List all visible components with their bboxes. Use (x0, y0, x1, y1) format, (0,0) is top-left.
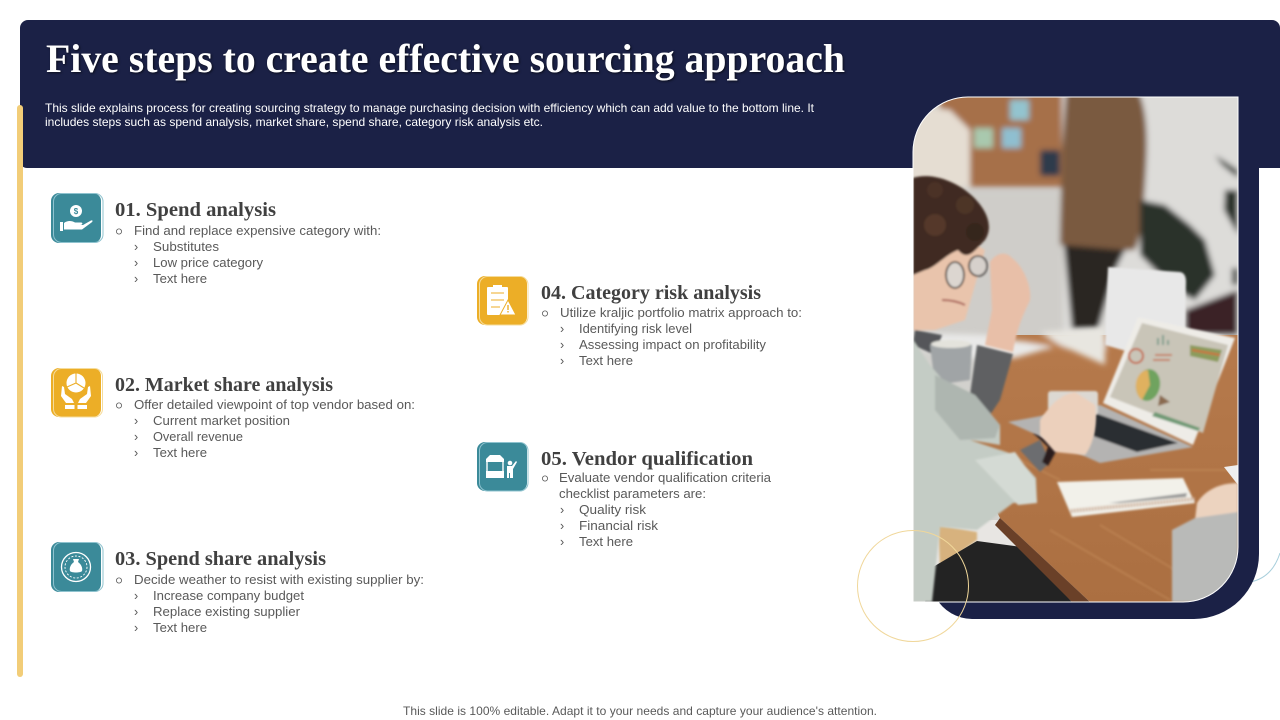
text block: vendor qualification: › (560, 519, 564, 533)
text block: spend analysis: Low price category (153, 256, 264, 270)
text block: category risk analysis (542, 306, 802, 368)
icon: hand holding coin (51, 193, 103, 243)
notebook (1057, 478, 1195, 517)
text block: spend share analysis: Replace existing supplier (153, 605, 300, 619)
footer note: This slide is 100% editable. Adapt it to your needs and capture your audience's attention. (403, 704, 877, 718)
right person (1172, 483, 1238, 602)
left accent bar (17, 105, 23, 677)
shirt (913, 340, 1037, 602)
heading: vendor qualification: 05. Vendor qualification (541, 448, 754, 470)
text block: vendor qualification: Financial risk (579, 519, 659, 533)
text block: spend share analysis: Increase company budget (153, 589, 305, 603)
paper on table (1224, 465, 1238, 485)
text block: spend analysis (116, 224, 381, 286)
description (45, 101, 815, 129)
text block: spend analysis: › (134, 272, 138, 286)
text block: vendor qualification: Text here (579, 535, 633, 549)
heading: spend analysis: 01. Spend analysis (115, 199, 276, 221)
text block: spend share analysis: Decide weather to resist with existing supplier by: (134, 573, 424, 587)
coffee mug and hand (1040, 391, 1098, 455)
navy frame behind photo (936, 160, 1259, 619)
title: Five steps to create effective sourcing approach (46, 36, 845, 81)
text block: spend analysis: Find and replace expensive category with: (134, 224, 381, 238)
text block: spend analysis: Substitutes (153, 240, 219, 254)
text block: category risk analysis: Utilize kraljic portfolio matrix approach to: (560, 306, 802, 320)
left mug (930, 342, 972, 385)
text block: market share analysis (116, 398, 415, 460)
text block: category risk analysis: › (560, 322, 564, 336)
decorative arc: blue (1250, 553, 1280, 582)
step 01 (51, 193, 381, 286)
text block: spend share analysis (116, 573, 424, 635)
text block: spend share analysis: › (134, 589, 138, 603)
wrist and watch (1020, 440, 1050, 472)
laptop (1008, 317, 1235, 463)
icon: clipboard with warning (477, 276, 528, 325)
text block: market share analysis: › (134, 430, 138, 444)
photo: team at office table with laptop (905, 90, 1245, 602)
decorative circle: yellow (858, 530, 968, 642)
description: This slide explains process for creating sourcing strategy to manage purchasing decision with efficiency which can add value to the bottom line. It (45, 101, 815, 115)
text block: category risk analysis: Text here (579, 354, 633, 368)
text block: vendor qualification (542, 471, 771, 549)
text block: vendor qualification: › (560, 503, 564, 517)
heading: market share analysis: 02. Market share analysis (115, 374, 333, 396)
laptop behind (1105, 267, 1186, 355)
text block: spend analysis: Text here (153, 272, 207, 286)
description: includes steps such as spend analysis, market share, spend share, category risk analysis etc. (45, 115, 543, 129)
text block: market share analysis: Offer detailed viewpoint of top vendor based on: (134, 398, 415, 412)
plant (1140, 200, 1215, 300)
step 05 (477, 442, 771, 549)
text block: market share analysis: Overall revenue (153, 430, 243, 444)
text block: market share analysis: › (134, 414, 138, 428)
icon: money bag badge (51, 542, 103, 592)
text block: spend share analysis: Text here (153, 621, 207, 635)
text block: spend share analysis: › (134, 605, 138, 619)
text block: category risk analysis: Assessing impact on profitability (579, 338, 767, 352)
step 04 (477, 276, 802, 368)
text block: vendor qualification: › (560, 535, 564, 549)
text block: spend analysis: › (134, 240, 138, 254)
text block: vendor qualification: Quality risk (579, 503, 647, 517)
text block: spend share analysis: › (134, 621, 138, 635)
icon: hand holding coin: $ (74, 207, 79, 216)
woman hair and face (913, 176, 1058, 602)
icon: vendor stall with person (477, 442, 528, 491)
heading: category risk analysis: 04. Category risk analysis (541, 282, 761, 304)
photo outline (913, 97, 1238, 602)
header band (20, 20, 1280, 168)
text block: category risk analysis: Identifying risk level (579, 322, 692, 336)
text block: market share analysis: › (134, 446, 138, 460)
table (960, 335, 1238, 602)
text block: spend analysis: › (134, 256, 138, 270)
text block: market share analysis: Text here (153, 446, 207, 460)
grain (1054, 526, 1170, 599)
icon: hands and pie chart (51, 368, 102, 417)
text block: vendor qualification: Evaluate vendor qualification criteria (559, 471, 771, 485)
step 03 (51, 542, 424, 635)
raised hand (985, 254, 1030, 352)
step 02 (51, 368, 415, 460)
under table (925, 520, 1090, 602)
text block: category risk analysis: › (560, 338, 564, 352)
text block: vendor qualification: checklist parameters are: (559, 487, 706, 501)
gray knit sleeve (970, 345, 1013, 415)
text block: market share analysis: Current market position (153, 414, 290, 428)
heading: spend share analysis: 03. Spend share analysis (115, 548, 326, 570)
text block: category risk analysis: › (560, 354, 564, 368)
